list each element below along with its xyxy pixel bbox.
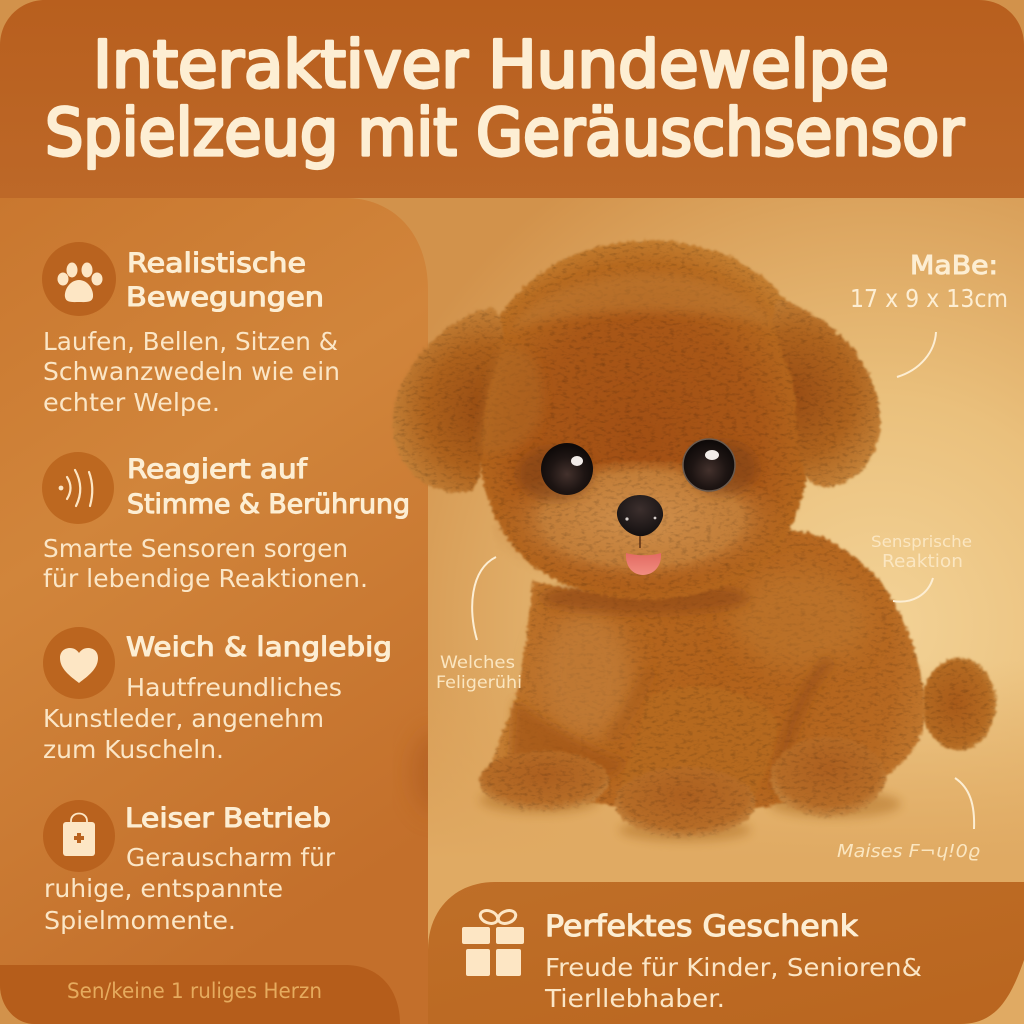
head top tuft	[510, 274, 780, 330]
text block	[43, 673, 342, 764]
ground shadows	[480, 786, 901, 842]
text block: Freude für Kinder, Senioren&	[545, 953, 922, 982]
text block: für lebendige Reaktionen.	[43, 564, 368, 593]
annotation: dimensions	[850, 251, 1008, 377]
feature: Leiser Betrieb	[43, 800, 336, 935]
text block: Hautfreundliches	[126, 673, 342, 702]
annotation: bottom right: Maises F¬ɥ!0ϱ	[837, 841, 981, 862]
shoulder highlight	[730, 570, 870, 670]
nose	[617, 495, 663, 536]
annotation: soft fur	[436, 557, 522, 693]
eye: right	[683, 439, 735, 491]
left face fold	[478, 348, 543, 454]
feature: Weich und langlebig	[43, 627, 392, 764]
left leg shading	[510, 700, 625, 782]
arrow: bottom right	[955, 778, 974, 829]
neck shadow	[540, 582, 750, 614]
feature: Realistische Bewegungen	[42, 242, 340, 417]
text block: Smarte Sensoren sorgen	[43, 534, 348, 563]
title: Interaktiver Hundewelpe	[93, 28, 889, 103]
title	[45, 28, 964, 171]
text block	[43, 534, 368, 593]
heading: Bewegungen	[126, 282, 324, 313]
heading: Perfektes Geschenk	[545, 909, 858, 943]
eye shadows	[517, 441, 758, 501]
eye: left	[541, 443, 593, 495]
footer text: Sen/keine 1 ruliges Herzn	[67, 979, 322, 1003]
annotation: sensory reaction: Reaktion	[882, 551, 963, 572]
annotation: sensory reaction	[871, 532, 972, 602]
annotation: soft fur: Feligerühi	[436, 673, 522, 693]
ear: right	[772, 298, 881, 488]
text block: Kunstleder, angenehm	[43, 704, 324, 733]
text block: Spielmomente.	[44, 906, 236, 935]
panel: perfect gift	[428, 882, 1024, 1024]
heading: Realistische	[127, 248, 306, 279]
annotation: bottom right	[837, 778, 981, 862]
footer strip	[0, 965, 400, 1024]
body	[490, 529, 926, 812]
shade between leg and thigh	[775, 660, 830, 790]
text block	[544, 953, 922, 1013]
mouth and tongue	[626, 536, 661, 575]
annotation: dimensions: MaBe:	[910, 251, 998, 281]
heading	[127, 454, 410, 520]
heading: Weich & langlebig	[126, 632, 392, 663]
text block: Laufen, Bellen, Sitzen &	[43, 327, 338, 356]
text block: echter Welpe.	[43, 388, 220, 417]
icon: gift	[462, 908, 524, 976]
paws	[478, 685, 886, 839]
text block: zum Kuscheln.	[43, 735, 224, 764]
feature: Reagiert auf Stimme und Berührung	[42, 452, 410, 593]
icon: heart	[43, 627, 115, 699]
icon: sound waves	[42, 452, 114, 524]
panel: left features background	[0, 198, 460, 1024]
icon: bag with cross	[43, 800, 115, 872]
ear: left	[392, 306, 504, 493]
shade between chest and front leg	[610, 670, 650, 740]
heading: Reagiert auf	[127, 454, 309, 485]
arrow: soft fur	[472, 557, 496, 640]
muzzle	[492, 460, 792, 600]
text block: Tierllebhaber.	[544, 984, 725, 1013]
annotation: dimensions: 17 x 9 x 13cm	[850, 284, 1008, 313]
text block: Schwanzwedeln wie ein	[43, 357, 340, 386]
tail	[921, 657, 997, 751]
arrow: sensory reaction	[893, 578, 933, 602]
text block	[44, 843, 336, 935]
heading: Leiser Betrieb	[125, 803, 331, 834]
heading	[126, 248, 324, 313]
head	[473, 240, 815, 600]
annotation: sensory reaction: Sensprische	[871, 532, 972, 551]
annotation: soft fur: Welches	[440, 653, 515, 673]
text block: ruhige, entspannte	[44, 874, 283, 903]
heading: Stimme & Berührung	[127, 489, 410, 520]
text block	[43, 327, 340, 417]
text block: Gerauscharm für	[126, 843, 336, 872]
arrow: dimensions	[897, 332, 936, 377]
header band	[0, 0, 1024, 198]
chest highlight	[537, 610, 633, 740]
icon: paw	[42, 242, 116, 316]
puppy illustration	[392, 240, 997, 842]
title: Spielzeug mit Geräuschsensor	[45, 96, 964, 171]
